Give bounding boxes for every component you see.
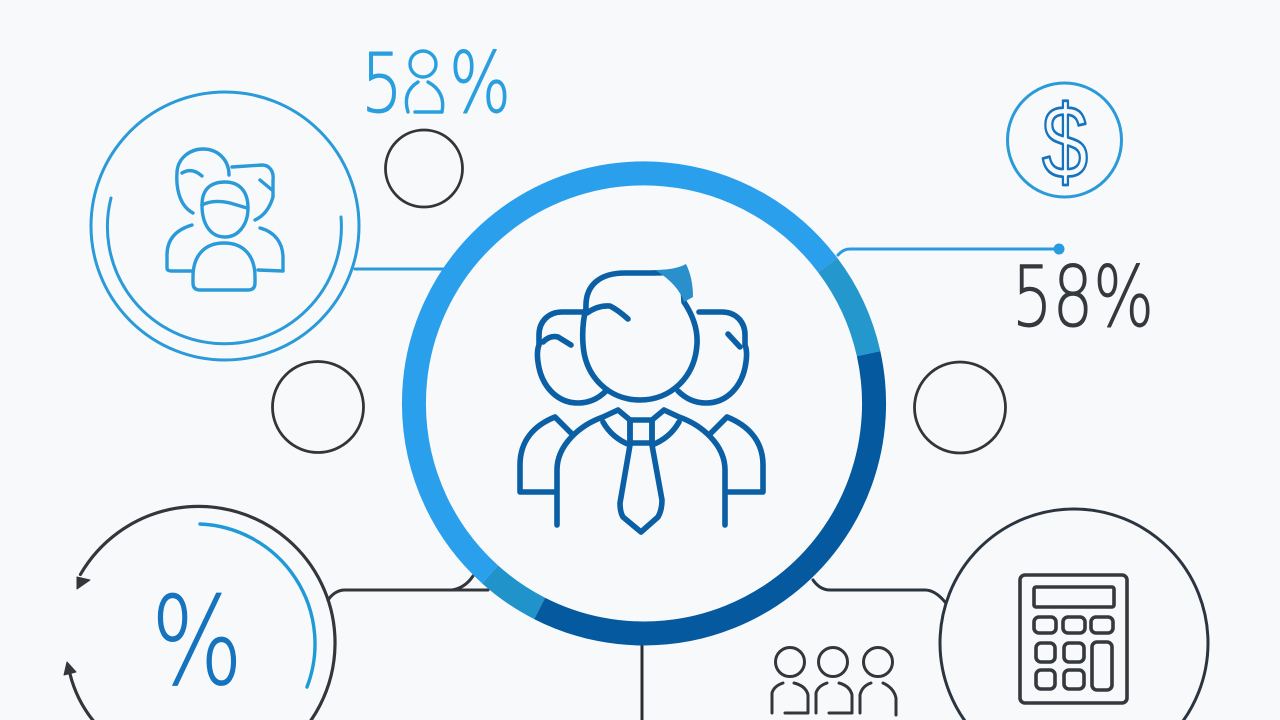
connector: central ring to calculator circle — [813, 580, 945, 602]
main body — [557, 410, 630, 525]
right head — [678, 312, 747, 403]
cycle arrows — [64, 506, 335, 720]
small empty circle left — [272, 362, 364, 452]
icon: dollar circle — [1008, 83, 1122, 200]
stat: 58% with person in place of the 8: % — [449, 34, 511, 132]
stat: 58% with person in place of the 8 — [361, 34, 511, 132]
connector: central ring to percent circle — [328, 576, 488, 600]
tie — [630, 420, 652, 443]
side bodies — [520, 417, 573, 492]
stat: 58% with person in place of the 8: 5 — [361, 37, 403, 132]
main head — [583, 270, 697, 400]
icon: dollar circle: $ — [1042, 84, 1088, 200]
central ring — [414, 173, 874, 633]
icon: people group — [167, 149, 283, 290]
left head — [537, 312, 606, 403]
panel: calculator circle — [940, 509, 1208, 720]
connector: people circle to central ring — [355, 268, 445, 270]
icon: calculator — [1020, 575, 1127, 703]
connector: central ring downward — [640, 646, 644, 720]
icon: central business team — [520, 264, 763, 532]
brows — [587, 306, 628, 319]
panel: people circle — [91, 92, 359, 360]
blue arc — [200, 524, 315, 687]
small empty circle right — [914, 362, 1006, 453]
hair tuft — [655, 264, 693, 302]
panel: percent circle — [64, 506, 335, 720]
icon: three people — [772, 648, 896, 715]
small empty circle top — [386, 130, 462, 207]
percent glyph: % — [151, 571, 243, 713]
connector: central ring to 58% callout — [838, 244, 1064, 255]
icon: person as digit 8 — [406, 51, 443, 112]
stat: 58%: 58% — [1012, 248, 1154, 346]
